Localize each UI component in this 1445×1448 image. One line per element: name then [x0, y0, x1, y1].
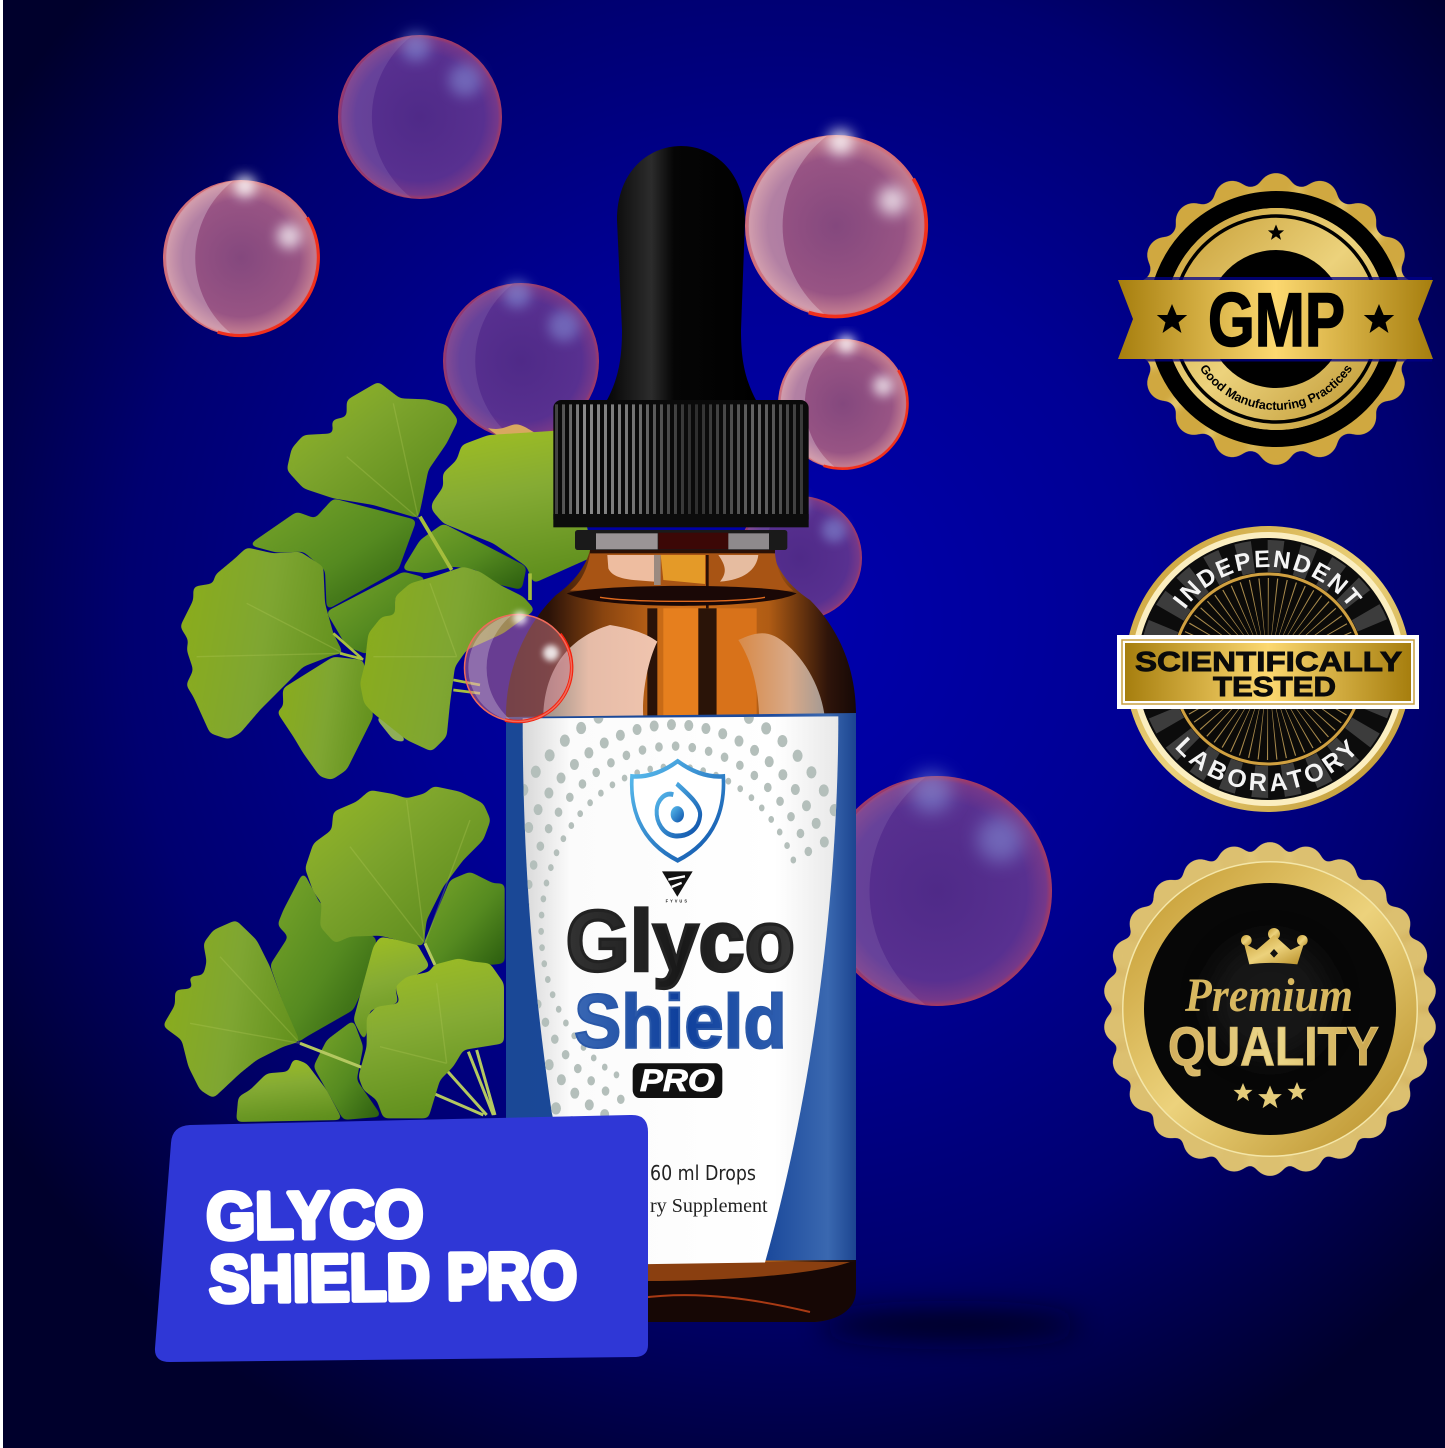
bottle shadow: [820, 1310, 1080, 1340]
halftone dot arcs: [523, 716, 836, 1116]
tested banner: TESTED: [1213, 671, 1336, 702]
ribbed cap: [553, 400, 809, 527]
neck amber and reflections: [543, 553, 825, 718]
Premium script text: Premium: [1184, 969, 1353, 1022]
badge: premium quality: [1113, 852, 1427, 1166]
card title: SHIELD PRO: [209, 1238, 577, 1316]
icon: brand triangle: FYVUS: [666, 898, 689, 904]
icon: shield with drop: [632, 761, 724, 860]
ginkgo leaves: lower cluster: [163, 786, 505, 1122]
volume text: 60 ml Drops: [650, 1162, 756, 1185]
product name: Shield: Shield: [574, 979, 787, 1064]
three stars: [1234, 1082, 1306, 1108]
icon: crown: [1241, 928, 1308, 964]
supplement text: ry Supplement: [650, 1195, 768, 1217]
dropper bottle: [485, 146, 856, 1322]
ribbon stars: [1157, 304, 1394, 333]
card title: GLYCO: [206, 1177, 424, 1253]
tested banner: SCIENTIFICALLY: [1135, 646, 1402, 677]
amber glass body: [506, 550, 856, 1322]
PRO pill: PRO: [640, 1064, 715, 1099]
bubbles behind the bottle: [163, 32, 1052, 1006]
product name card: [155, 1115, 648, 1362]
white label: [522, 716, 838, 1264]
GMP ribbon: [1118, 280, 1433, 359]
product name: Glyco: Glyco: [566, 892, 795, 989]
laboratory arc text: LABORATORY: [1175, 736, 1354, 792]
icon: brand triangle: [662, 871, 693, 904]
small bubble in front of the bottle: [464, 611, 572, 722]
neck collar: [575, 530, 787, 553]
tested banner: [1117, 635, 1419, 709]
ginkgo leaves: upper cluster: [180, 382, 593, 780]
independent arc text: INDEPENDENT: [1172, 550, 1363, 609]
GMP arc text: Good Manufacturing Practices: [1201, 365, 1352, 410]
blue label underlay: [506, 713, 856, 1262]
rubber dropper bulb: [606, 146, 757, 402]
card title: [206, 1175, 577, 1316]
PRO pill: [633, 1063, 722, 1099]
GMP lettering: GMP: [1208, 278, 1345, 363]
QUALITY text: QUALITY: [1168, 1015, 1379, 1077]
badge: scientifically tested: [1117, 526, 1419, 812]
bottle base: [508, 1262, 856, 1322]
badge: GMP: [1118, 173, 1433, 465]
